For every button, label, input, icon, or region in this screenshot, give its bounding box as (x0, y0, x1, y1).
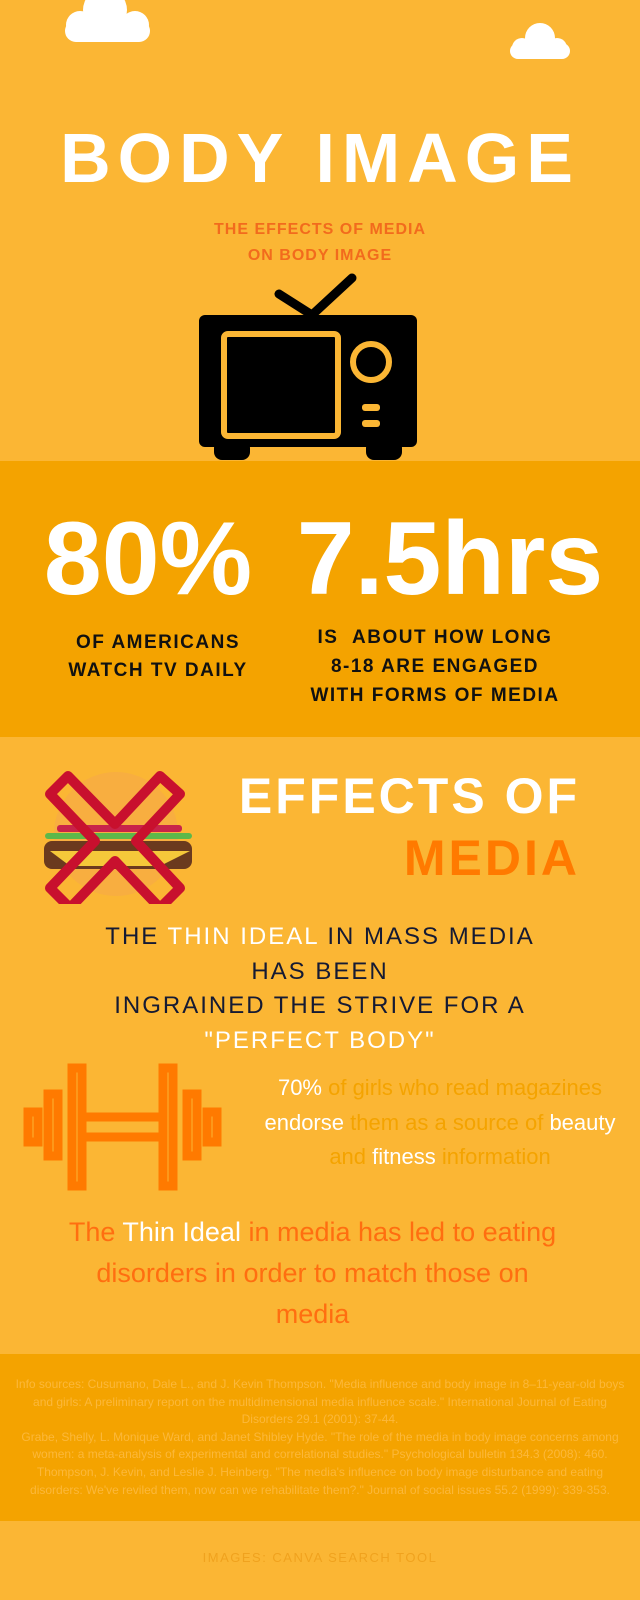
text: info sources: and girls: A preliminary report on the multidimensional media influence scale." International Journal of Eating (33, 1395, 607, 1409)
text: info sources: disorders: We've reviled them, now can we rehabilitate them?." Journal of social issues 55.2 (1999): 339-353. (30, 1483, 610, 1497)
subtitle (214, 221, 426, 264)
text: 70% stat: endorse them as a source of beauty (264, 1110, 616, 1134)
icon: cloud right (510, 23, 570, 59)
stat label 7.5hrs: 8-18 ARE ENGAGED (331, 656, 539, 677)
band: sources background (0, 1354, 640, 1521)
stat label 7.5hrs: IS ABOUT HOW LONG (318, 627, 552, 648)
text: thin ideal eating disorders: media (276, 1299, 349, 1329)
subtitle: ON BODY IMAGE (248, 247, 392, 264)
icon: burger crossed (44, 771, 192, 904)
stat label 80% (68, 632, 248, 681)
text: thin ideal eating disorders: disorders in order to match those on (96, 1258, 529, 1288)
stat: 7.5hrs: 7.5hrs (297, 501, 603, 617)
subtitle: THE EFFECTS OF MEDIA (214, 221, 426, 238)
heading: effects of media: MEDIA (404, 830, 580, 886)
stat label 7.5hrs (310, 627, 560, 706)
heading: effects of media (239, 768, 580, 886)
stat label 80%: WATCH TV DAILY (68, 660, 248, 681)
text: info sources: Info sources: Cusumano, Dale L., and J. Kevin Thompson. "Media influence and body image in 8–11-year-old boys (16, 1377, 624, 1391)
text: info sources: Thompson, J. Kevin, and Leslie J. Heinberg. "The media's influence on body image disturbance and eating (37, 1465, 603, 1479)
text: thin ideal statement: THE THIN IDEAL IN MASS MEDIA (105, 923, 535, 950)
text: thin ideal statement: INGRAINED THE STRIVE FOR A (114, 992, 526, 1019)
text: thin ideal eating disorders: The Thin Ideal in media has led to eating (69, 1217, 556, 1247)
text: info sources (16, 1377, 624, 1497)
text: thin ideal statement: HAS BEEN (251, 958, 389, 985)
text: info sources: Grabe, Shelly, L. Monique Ward, and Janet Shibley Hyde. "The role of the media in body image concerns among (21, 1430, 619, 1444)
text: thin ideal eating disorders (69, 1217, 556, 1329)
text: 70% stat: 70% of girls who read magazines (278, 1075, 602, 1100)
heading: effects of media: EFFECTS OF (239, 768, 580, 824)
stat label 80%: OF AMERICANS (76, 632, 240, 653)
icon: dumbbell (24, 1064, 222, 1190)
text: thin ideal statement (105, 923, 535, 1054)
text: info sources: women: a meta-analysis of experimental and correlational studies." Psychological bulletin 134.3 (2008): 460. (32, 1447, 608, 1461)
text: 70% stat (264, 1075, 616, 1169)
icon: cloud left (65, 0, 150, 42)
stat: 80%: 80% (44, 501, 252, 617)
text: info sources: Disorders 29.1 (2001): 37-44. (242, 1412, 398, 1426)
stat label 7.5hrs: WITH FORMS OF MEDIA (310, 685, 560, 706)
band: stats background (0, 461, 640, 737)
icon: tv (199, 274, 417, 460)
text: image credits: IMAGES: CANVA SEARCH TOOL (203, 1550, 437, 1565)
text: 70% stat: and fitness information (329, 1144, 551, 1169)
title: BODY IMAGE (60, 119, 580, 197)
text: thin ideal statement: "PERFECT BODY" (204, 1027, 436, 1054)
